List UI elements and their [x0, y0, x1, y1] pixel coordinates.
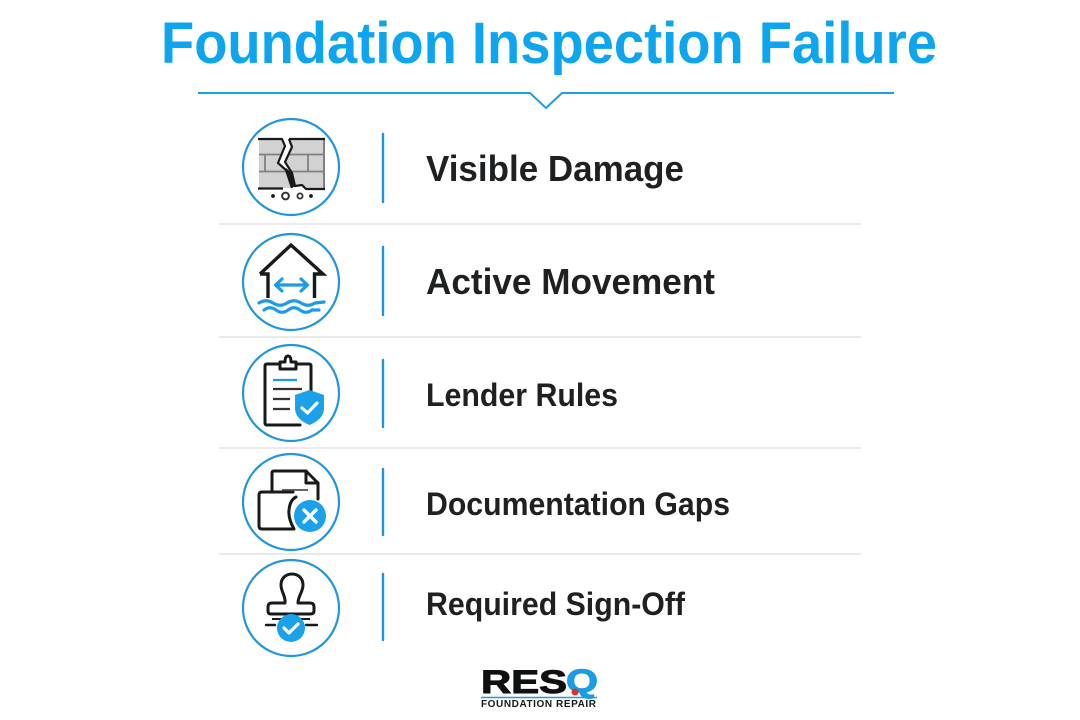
vertical bar	[382, 247, 384, 315]
icon: documents with x badge	[243, 454, 339, 550]
vertical bar	[382, 574, 384, 640]
vertical bar	[382, 469, 384, 535]
icon: stamp with check badge	[243, 560, 339, 656]
label: Lender Rules	[426, 377, 618, 413]
row: active movement	[243, 234, 715, 330]
row: visible damage	[243, 119, 684, 215]
logo: RESQ Foundation Repair: Q	[566, 663, 598, 699]
row: documentation gaps	[243, 454, 730, 550]
logo: RESQ Foundation Repair: RES	[481, 664, 567, 700]
label: Visible Damage	[426, 148, 684, 189]
icon: cracked wall	[243, 119, 339, 215]
title underline with notch	[198, 93, 894, 108]
icon: house with arrow and water	[243, 234, 339, 330]
label: Required Sign-Off	[426, 586, 685, 622]
logo: RESQ Foundation Repair	[481, 663, 598, 710]
vertical bar	[382, 360, 384, 427]
title: Foundation Inspection Failure	[161, 11, 937, 76]
icon: clipboard with shield	[243, 345, 339, 441]
vertical bar	[382, 134, 384, 202]
label: Active Movement	[426, 261, 715, 302]
logo: RESQ Foundation Repair: FOUNDATION REPAIR	[481, 699, 597, 710]
label: Documentation Gaps	[426, 486, 730, 522]
row: lender rules	[243, 345, 618, 441]
row: required sign-off	[243, 560, 685, 656]
